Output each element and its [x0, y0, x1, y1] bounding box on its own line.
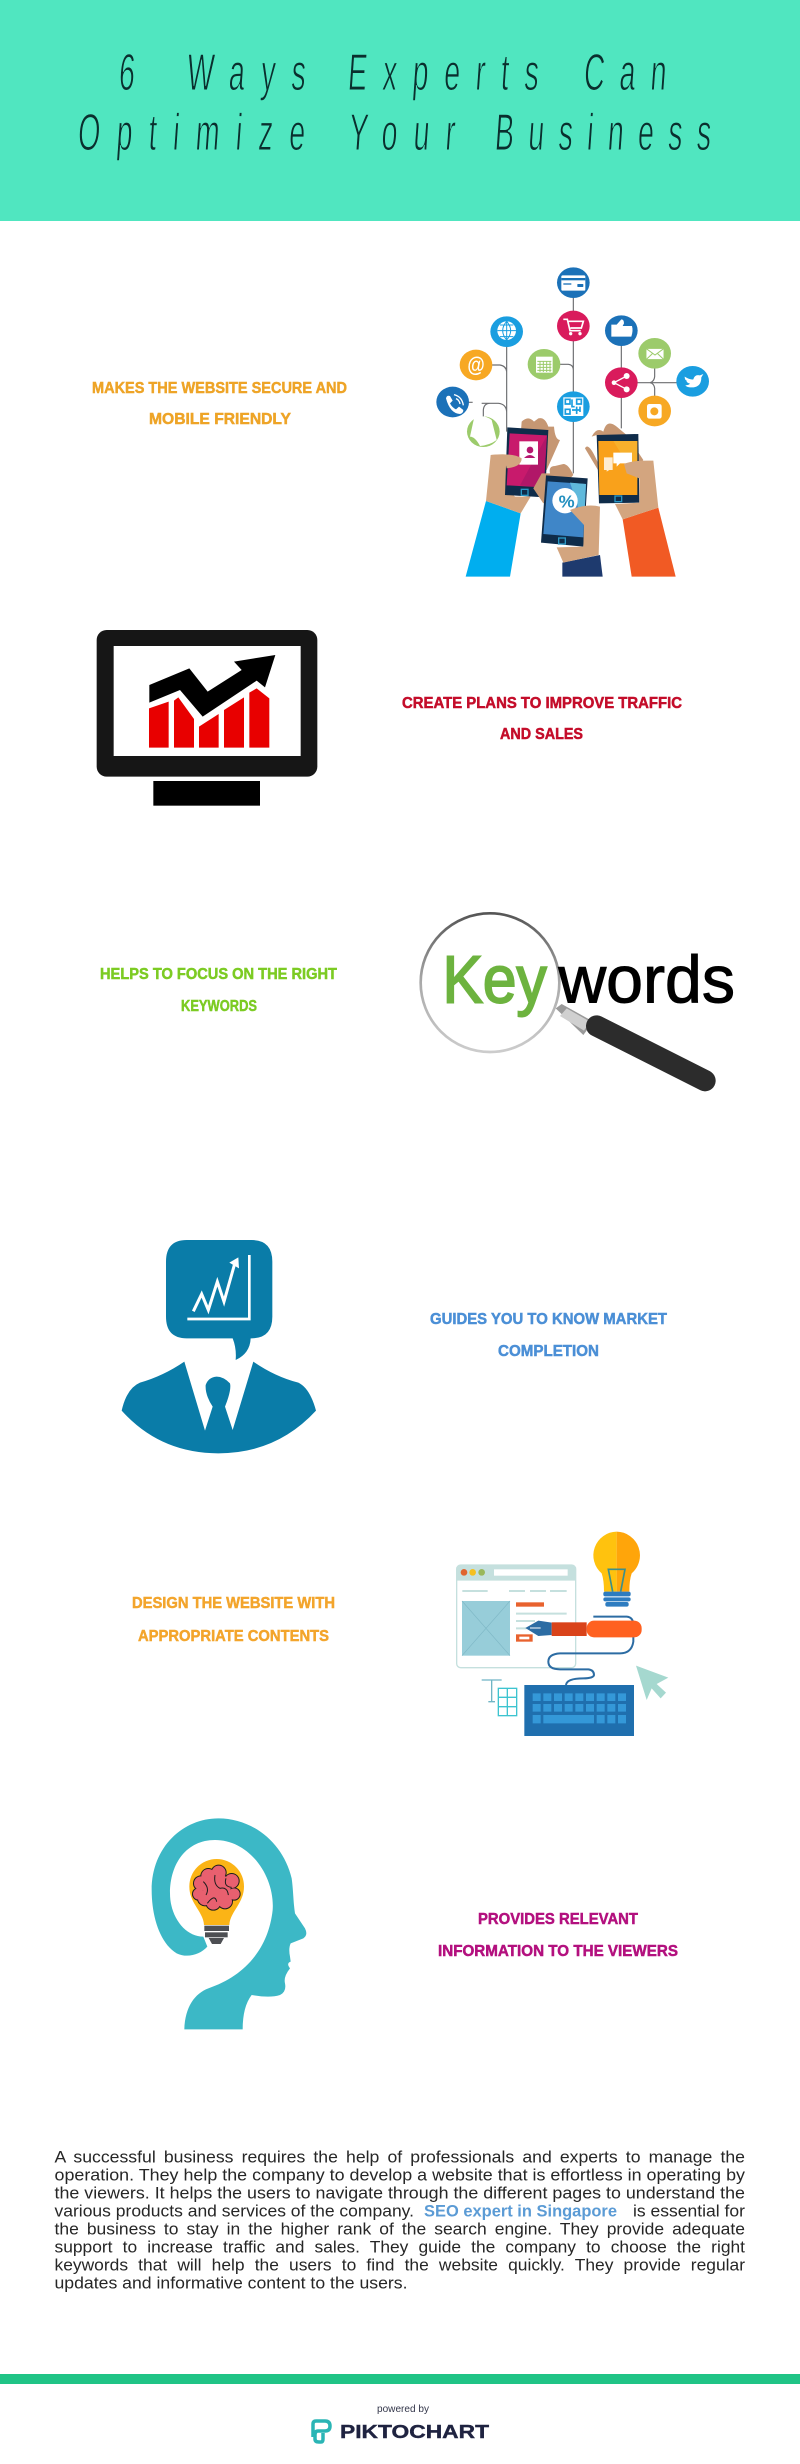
heading: relevant information: PROVIDES RELEVANT: [478, 1911, 638, 1928]
footer: logo: [313, 2421, 489, 2442]
ferrule: [556, 1004, 593, 1035]
heading: appropriate contents: [132, 1595, 335, 1645]
left arm and hand: [466, 418, 560, 577]
red bars: [149, 688, 269, 748]
title: Optimize: [76, 103, 307, 161]
heading: plans to improve traffic: CREATE PLANS TO IMPROVE TRAFFIC: [402, 695, 682, 712]
browser window: [457, 1565, 576, 1668]
heading: appropriate contents: APPROPRIATE CONTENTS: [138, 1628, 329, 1645]
body paragraph: keywords that will help the users to find the website quickly. They provide regular: [54, 2256, 746, 2274]
handle: [597, 1026, 705, 1081]
body paragraph: the business to stay in the higher rank of the search engine. They provide adequate: [54, 2220, 745, 2238]
heading: focus on the right keywords: KEYWORDS: [181, 998, 257, 1015]
cursor arrow: [636, 1666, 668, 1700]
title: Business: [493, 103, 713, 161]
heading: market completion: COMPLETION: [498, 1343, 599, 1360]
title: Can: [582, 43, 669, 101]
header band: [0, 0, 800, 221]
title: Your: [347, 103, 457, 161]
text and table glyphs: [482, 1680, 517, 1716]
link text: SEO expert in Singapore: [424, 2202, 617, 2220]
heading: plans to improve traffic: [402, 695, 682, 743]
icon: monitor with sales chart: [97, 630, 317, 806]
black trend arrow: [149, 655, 275, 717]
heading: focus on the right keywords: [100, 966, 337, 1015]
keyboard: [524, 1685, 634, 1736]
light bulb: [593, 1532, 640, 1607]
glass lens ring: [421, 913, 559, 1052]
logo mark: [313, 2421, 330, 2442]
heading: plans to improve traffic: AND SALES: [500, 726, 583, 743]
title: [76, 43, 713, 161]
body paragraph: various products and services of the company.: [54, 2202, 414, 2220]
wordmark: PIKTOCHART: [340, 2422, 489, 2442]
word words: words: [557, 944, 735, 1018]
suit body and tie: [122, 1362, 316, 1453]
heading: focus on the right keywords: HELPS TO FOCUS ON THE RIGHT: [100, 966, 337, 983]
heading: relevant information: [438, 1911, 678, 1960]
head spiral: [152, 1818, 306, 2029]
pen and cable: [525, 1617, 642, 1685]
chart in bubble: [187, 1255, 249, 1319]
heading: market completion: GUIDES YOU TO KNOW MARKET: [430, 1311, 667, 1328]
illustration: magnifying glass over Keywords: [421, 913, 735, 1081]
app icon circles: [436, 267, 709, 447]
heading: appropriate contents: DESIGN THE WEBSITE WITH: [132, 1595, 335, 1612]
icon glyphs: @: [467, 353, 485, 377]
heading: market completion: [430, 1311, 667, 1360]
middle arm and hand: %: [559, 492, 575, 512]
heading: relevant information: INFORMATION TO THE VIEWERS: [438, 1943, 678, 1960]
connector lines: [468, 283, 677, 473]
body paragraph: is essential for: [633, 2202, 746, 2220]
middle arm and hand: [533, 464, 603, 577]
title: Experts: [346, 43, 541, 101]
heading: secure and mobile friendly: MOBILE FRIENDLY: [149, 411, 291, 428]
icon glyphs: [446, 275, 703, 446]
bulb: [189, 1859, 244, 1944]
body paragraph: updates and informative content to the users.: [54, 2274, 408, 2292]
illustration: web design tools: [457, 1532, 668, 1736]
title: 6: [117, 43, 137, 101]
title: Ways: [185, 43, 308, 101]
body paragraph: the viewers. It helps the users to navigate through the different pages to understand the: [54, 2184, 745, 2202]
heading: secure and mobile friendly: [92, 380, 347, 428]
icon: businessman with chart speech bubble: [122, 1240, 316, 1453]
footer: powered by: powered by: [377, 2403, 430, 2415]
body paragraph: [54, 2148, 746, 2292]
footer band: [0, 2374, 800, 2384]
icon: head silhouette with brain bulb: [152, 1818, 306, 2029]
body paragraph: support to increase traffic and sales. They guide the company to choose the right: [54, 2238, 745, 2256]
right arm and hand: [585, 423, 676, 577]
speech bubble: [166, 1240, 272, 1360]
body paragraph: operation. They help the company to develop a website that is effortless in operating by: [54, 2166, 746, 2184]
illustration: hands holding phones with app icons: [436, 267, 709, 577]
body paragraph: A successful business requires the help of professionals and experts to manage the: [54, 2148, 745, 2166]
brain: [192, 1865, 241, 1911]
heading: secure and mobile friendly: MAKES THE WEBSITE SECURE AND: [92, 380, 347, 397]
word Key: Key: [443, 944, 547, 1018]
